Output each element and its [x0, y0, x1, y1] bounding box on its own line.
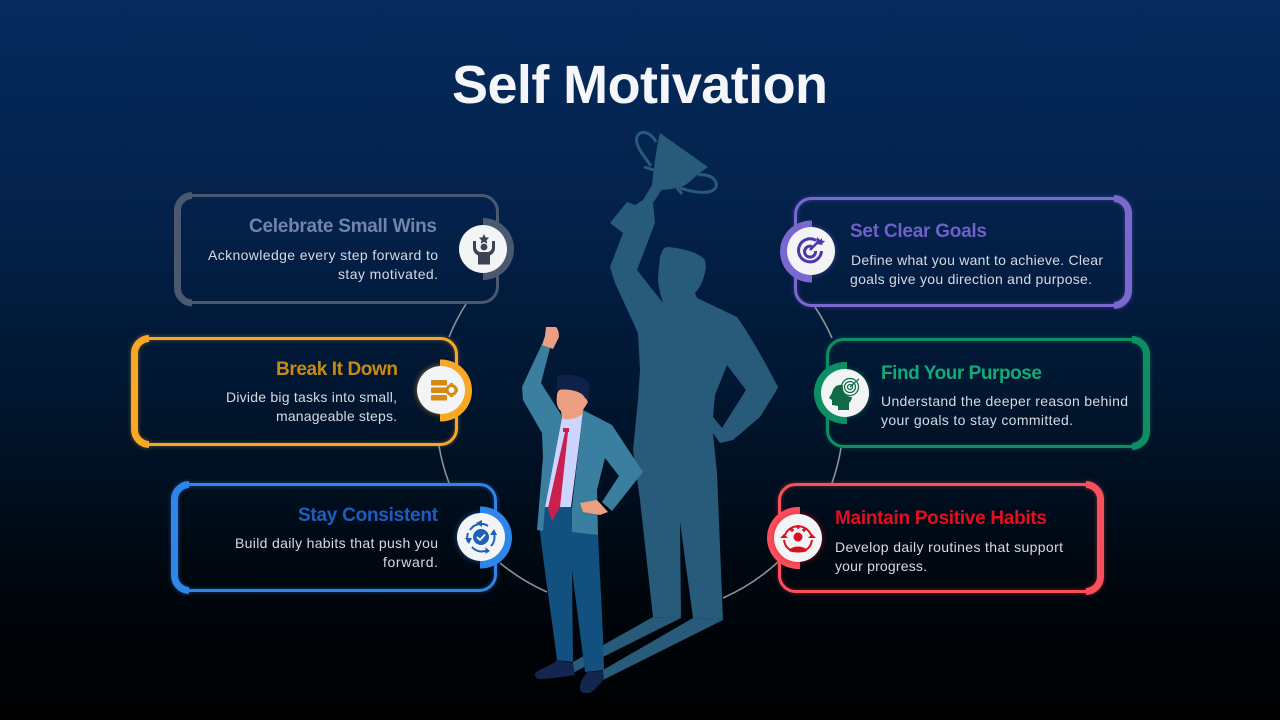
icon: person with habit cycle	[767, 507, 822, 569]
description	[850, 252, 1103, 287]
floor shadow	[573, 617, 681, 673]
trophy handles	[636, 132, 656, 170]
description: Define what you want to achieve. Clear	[851, 252, 1103, 268]
card border	[173, 484, 496, 590]
icon: cycle with check	[457, 506, 512, 568]
heading: Stay Consistent	[298, 505, 439, 526]
description: Build daily habits that push you	[235, 535, 438, 551]
description: manageable steps.	[276, 408, 397, 424]
icon: stacked tasks and gear	[417, 360, 472, 422]
man: tie	[548, 428, 569, 521]
description: forward.	[383, 554, 438, 570]
description: Develop daily routines that support	[835, 539, 1063, 555]
trophy cup	[652, 133, 708, 190]
card border	[176, 196, 498, 303]
man: hair	[557, 374, 590, 400]
heading: Celebrate Small Wins	[249, 216, 437, 237]
heading: Set Clear Goals	[850, 221, 987, 242]
card border	[780, 484, 1102, 592]
card border	[796, 198, 1130, 306]
card: Stay Consistent	[173, 484, 512, 590]
description: Acknowledge every step forward to	[208, 247, 438, 263]
card: Find Your Purpose	[814, 340, 1148, 446]
card: Celebrate Small Wins	[176, 196, 514, 303]
icon: head with target	[814, 362, 869, 424]
card border	[133, 338, 456, 444]
title: Self Motivation	[452, 55, 828, 115]
man: shirt	[545, 413, 583, 507]
description	[881, 393, 1128, 428]
icon: target with arrow	[780, 220, 835, 282]
illustration: businessman	[522, 327, 643, 693]
description: Divide big tasks into small,	[226, 389, 397, 405]
heading: Maintain Positive Habits	[835, 508, 1047, 529]
description: goals give you direction and purpose.	[850, 271, 1092, 287]
description: Understand the deeper reason behind	[881, 393, 1128, 409]
man: trousers	[540, 507, 604, 672]
man: shoes	[535, 660, 604, 693]
description	[226, 389, 397, 424]
card border	[828, 340, 1148, 446]
description	[235, 535, 438, 570]
man: neck and face	[557, 388, 588, 419]
card: Break It Down	[133, 338, 472, 444]
heading: Break It Down	[276, 359, 398, 380]
icon: person celebrating	[459, 218, 514, 280]
description: stay motivated.	[338, 266, 438, 282]
description	[835, 539, 1063, 574]
description: your goals to stay committed.	[881, 412, 1073, 428]
description: your progress.	[835, 558, 927, 574]
heading: Find Your Purpose	[881, 363, 1042, 384]
card: Maintain Positive Habits	[767, 484, 1102, 592]
man: hands	[542, 327, 608, 515]
card: Set Clear Goals	[780, 198, 1130, 306]
illustration: trophy shadow silhouette	[573, 132, 778, 680]
connector arc	[439, 304, 841, 598]
description	[208, 247, 438, 282]
man: jacket	[522, 344, 562, 531]
